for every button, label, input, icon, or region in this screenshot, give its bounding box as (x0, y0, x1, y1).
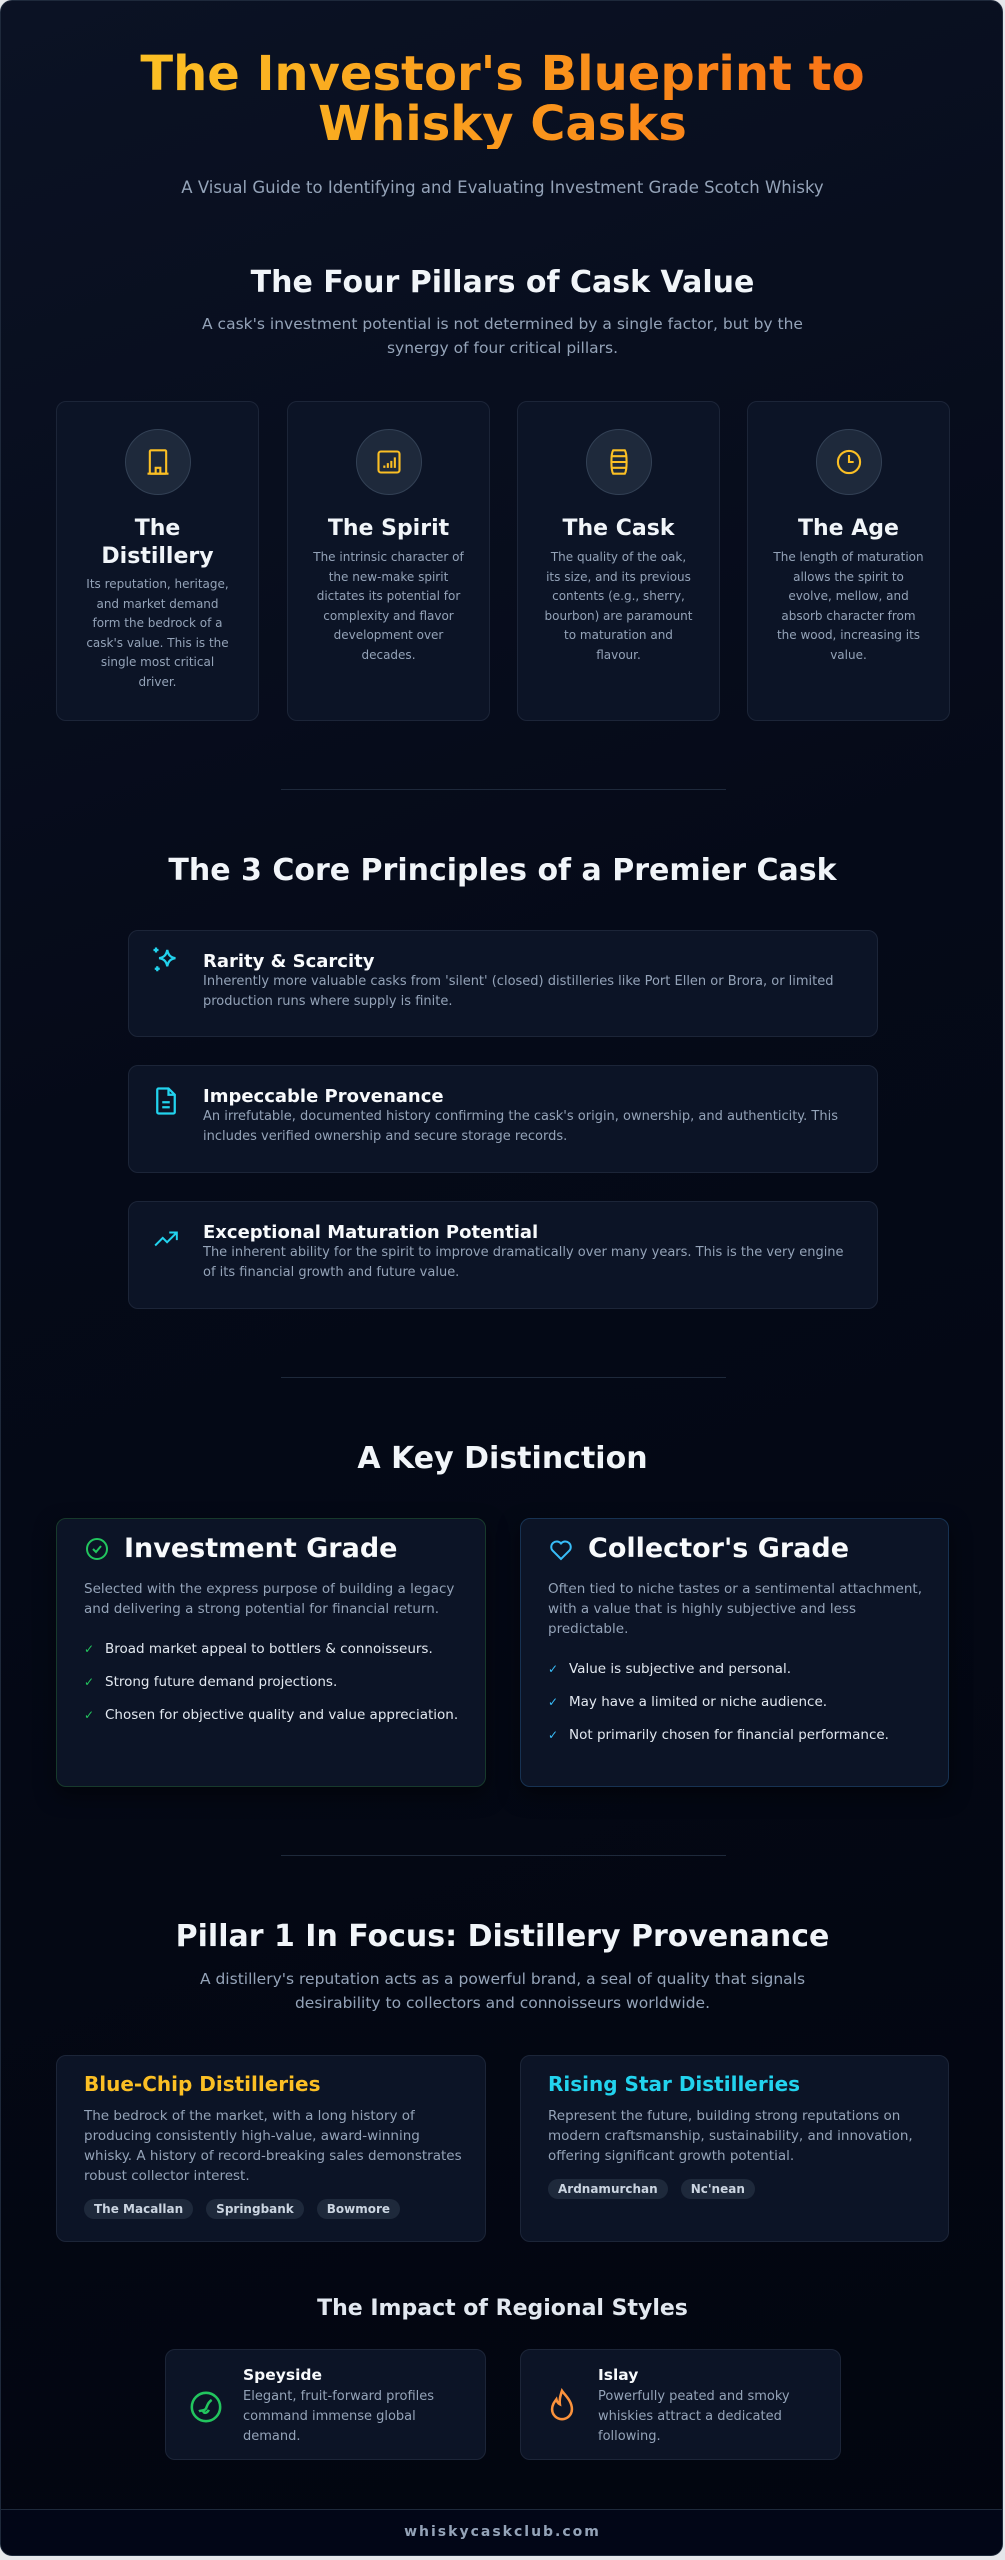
text: Its reputation, heritage, and market demand form the bedrock of a cask's value. This is the single most critical driver. (86, 577, 229, 688)
subtitle: A Visual Guide to Identifying and Evaluating Investment Grade Scotch Whisky (181, 178, 824, 197)
heading: Distillery (101, 544, 214, 569)
list: May have a limited or niche audience. (569, 1694, 827, 1710)
heading: The Spirit (328, 516, 449, 541)
panel: blue-chip (56, 2055, 486, 2242)
tags: Springbank (216, 2202, 294, 2216)
pillar 1 intro: A distillery's reputation acts as a powerful brand, a seal of quality that signals desirability to collectors and connoisseurs worldwide. (200, 1970, 805, 2012)
list: ✓ (548, 1662, 558, 1676)
title (1, 49, 1004, 149)
heading: Rarity & Scarcity (203, 951, 374, 972)
heading: Speyside (243, 2366, 322, 2384)
tags (84, 2199, 400, 2219)
heading: Investment Grade (124, 1533, 397, 1564)
panel: investment grade (56, 1518, 486, 1787)
panel: rising star (520, 2055, 949, 2242)
icon: flame (550, 2388, 574, 2420)
icon: leaf circle (190, 2392, 222, 2422)
text: An irrefutable, documented history confirming the cask's origin, ownership, and authenticity. This includes verified ownership and secure storage records. (203, 1109, 838, 1144)
text: Represent the future, building strong reputations on modern craftsmanship, sustainability, and innovation, offering significant growth potential. (548, 2108, 913, 2164)
list: ✓ (548, 1728, 558, 1742)
heading: The Age (798, 516, 899, 541)
list: ✓ (548, 1695, 558, 1709)
heading: The Cask (563, 516, 674, 541)
heading: Exceptional Maturation Potential (203, 1222, 538, 1243)
icon: sparkles (154, 948, 176, 972)
list: Chosen for objective quality and value appreciation. (105, 1707, 458, 1723)
icon: clock (816, 429, 882, 495)
panel: the cask (517, 401, 720, 721)
heading: Collector's Grade (588, 1533, 849, 1564)
tags: Bowmore (327, 2202, 390, 2216)
panel: islay (520, 2349, 841, 2460)
icon: barrel (586, 429, 652, 495)
panel: the spirit (287, 401, 490, 721)
text: The inherent ability for the spirit to improve dramatically over many years. This is the very engine of its financial growth and future value. (203, 1245, 844, 1280)
panel: collector's grade (520, 1518, 949, 1787)
list: ✓ (84, 1708, 94, 1722)
text: Inherently more valuable casks from 'silent' (closed) distilleries like Port Ellen or Brora, or limited production runs where supply is finite. (203, 974, 834, 1009)
tags: The Macallan (94, 2202, 183, 2216)
heading: core principles: The 3 Core Principles of a Premier Cask (168, 853, 837, 888)
footer (1, 2509, 1004, 2557)
text: The bedrock of the market, with a long history of producing consistently high-value, award-winning whisky. A history of record-breaking sales demonstrates robust collector interest. (84, 2108, 462, 2184)
text: Powerfully peated and smoky whiskies attract a dedicated following. (598, 2389, 790, 2444)
heading: Blue-Chip Distilleries (84, 2072, 320, 2096)
heading: Islay (598, 2366, 638, 2384)
list: Strong future demand projections. (105, 1674, 337, 1690)
list: ✓ (84, 1675, 94, 1689)
panel: rarity (128, 930, 878, 1037)
heading: regional styles: The Impact of Regional Styles (317, 2296, 688, 2321)
text: The intrinsic character of the new-make spirit dictates its potential for complexity and flavor development over decades. (313, 550, 464, 662)
panel: the age (747, 401, 950, 721)
heading: Rising Star Distilleries (548, 2072, 800, 2096)
icon: document (156, 1087, 176, 1115)
text: The length of maturation allows the spirit to evolve, mellow, and absorb character from the wood, increasing its value. (773, 550, 924, 662)
list: Not primarily chosen for financial performance. (569, 1727, 889, 1743)
title: The Investor's Blueprint to (140, 46, 865, 102)
heading: key distinction: A Key Distinction (357, 1441, 648, 1476)
list (548, 1661, 889, 1743)
icon: check circle (86, 1538, 108, 1560)
icon: heart (550, 1540, 572, 1560)
panel: the distillery (56, 401, 259, 721)
tags: Ardnamurchan (558, 2182, 658, 2196)
text: Selected with the express purpose of building a legacy and delivering a strong potential for financial return. (84, 1581, 454, 1617)
heading: pillar 1: Pillar 1 In Focus: Distillery Provenance (176, 1919, 829, 1954)
tags (548, 2179, 755, 2199)
text: The quality of the oak, its size, and its previous contents (e.g., sherry, bourbon) are paramount to maturation and flavour. (544, 550, 692, 662)
footer: whiskycaskclub.com (404, 2524, 601, 2540)
text: Elegant, fruit-forward profiles command immense global demand. (243, 2389, 434, 2444)
list (84, 1641, 458, 1723)
panel: speyside (165, 2349, 486, 2460)
heading (101, 516, 214, 569)
heading: The (135, 516, 180, 541)
four pillars intro: A cask's investment potential is not determined by a single factor, but by the synergy of four critical pillars. (202, 315, 803, 357)
list: Broad market appeal to bottlers & connoisseurs. (105, 1641, 433, 1657)
icon: trending up (154, 1232, 178, 1246)
title: Whisky Casks (318, 96, 687, 152)
heading: Impeccable Provenance (203, 1086, 444, 1107)
tags: Nc'nean (691, 2182, 745, 2196)
icon: building (125, 429, 191, 495)
panel: provenance (128, 1065, 878, 1173)
panel: maturation (128, 1201, 878, 1309)
icon: chart (356, 429, 422, 495)
text: Often tied to niche tastes or a sentimental attachment, with a value that is highly subjective and less predictable. (548, 1581, 922, 1637)
list: Value is subjective and personal. (569, 1661, 791, 1677)
heading: four pillars: The Four Pillars of Cask Value (251, 265, 754, 300)
list: ✓ (84, 1642, 94, 1656)
